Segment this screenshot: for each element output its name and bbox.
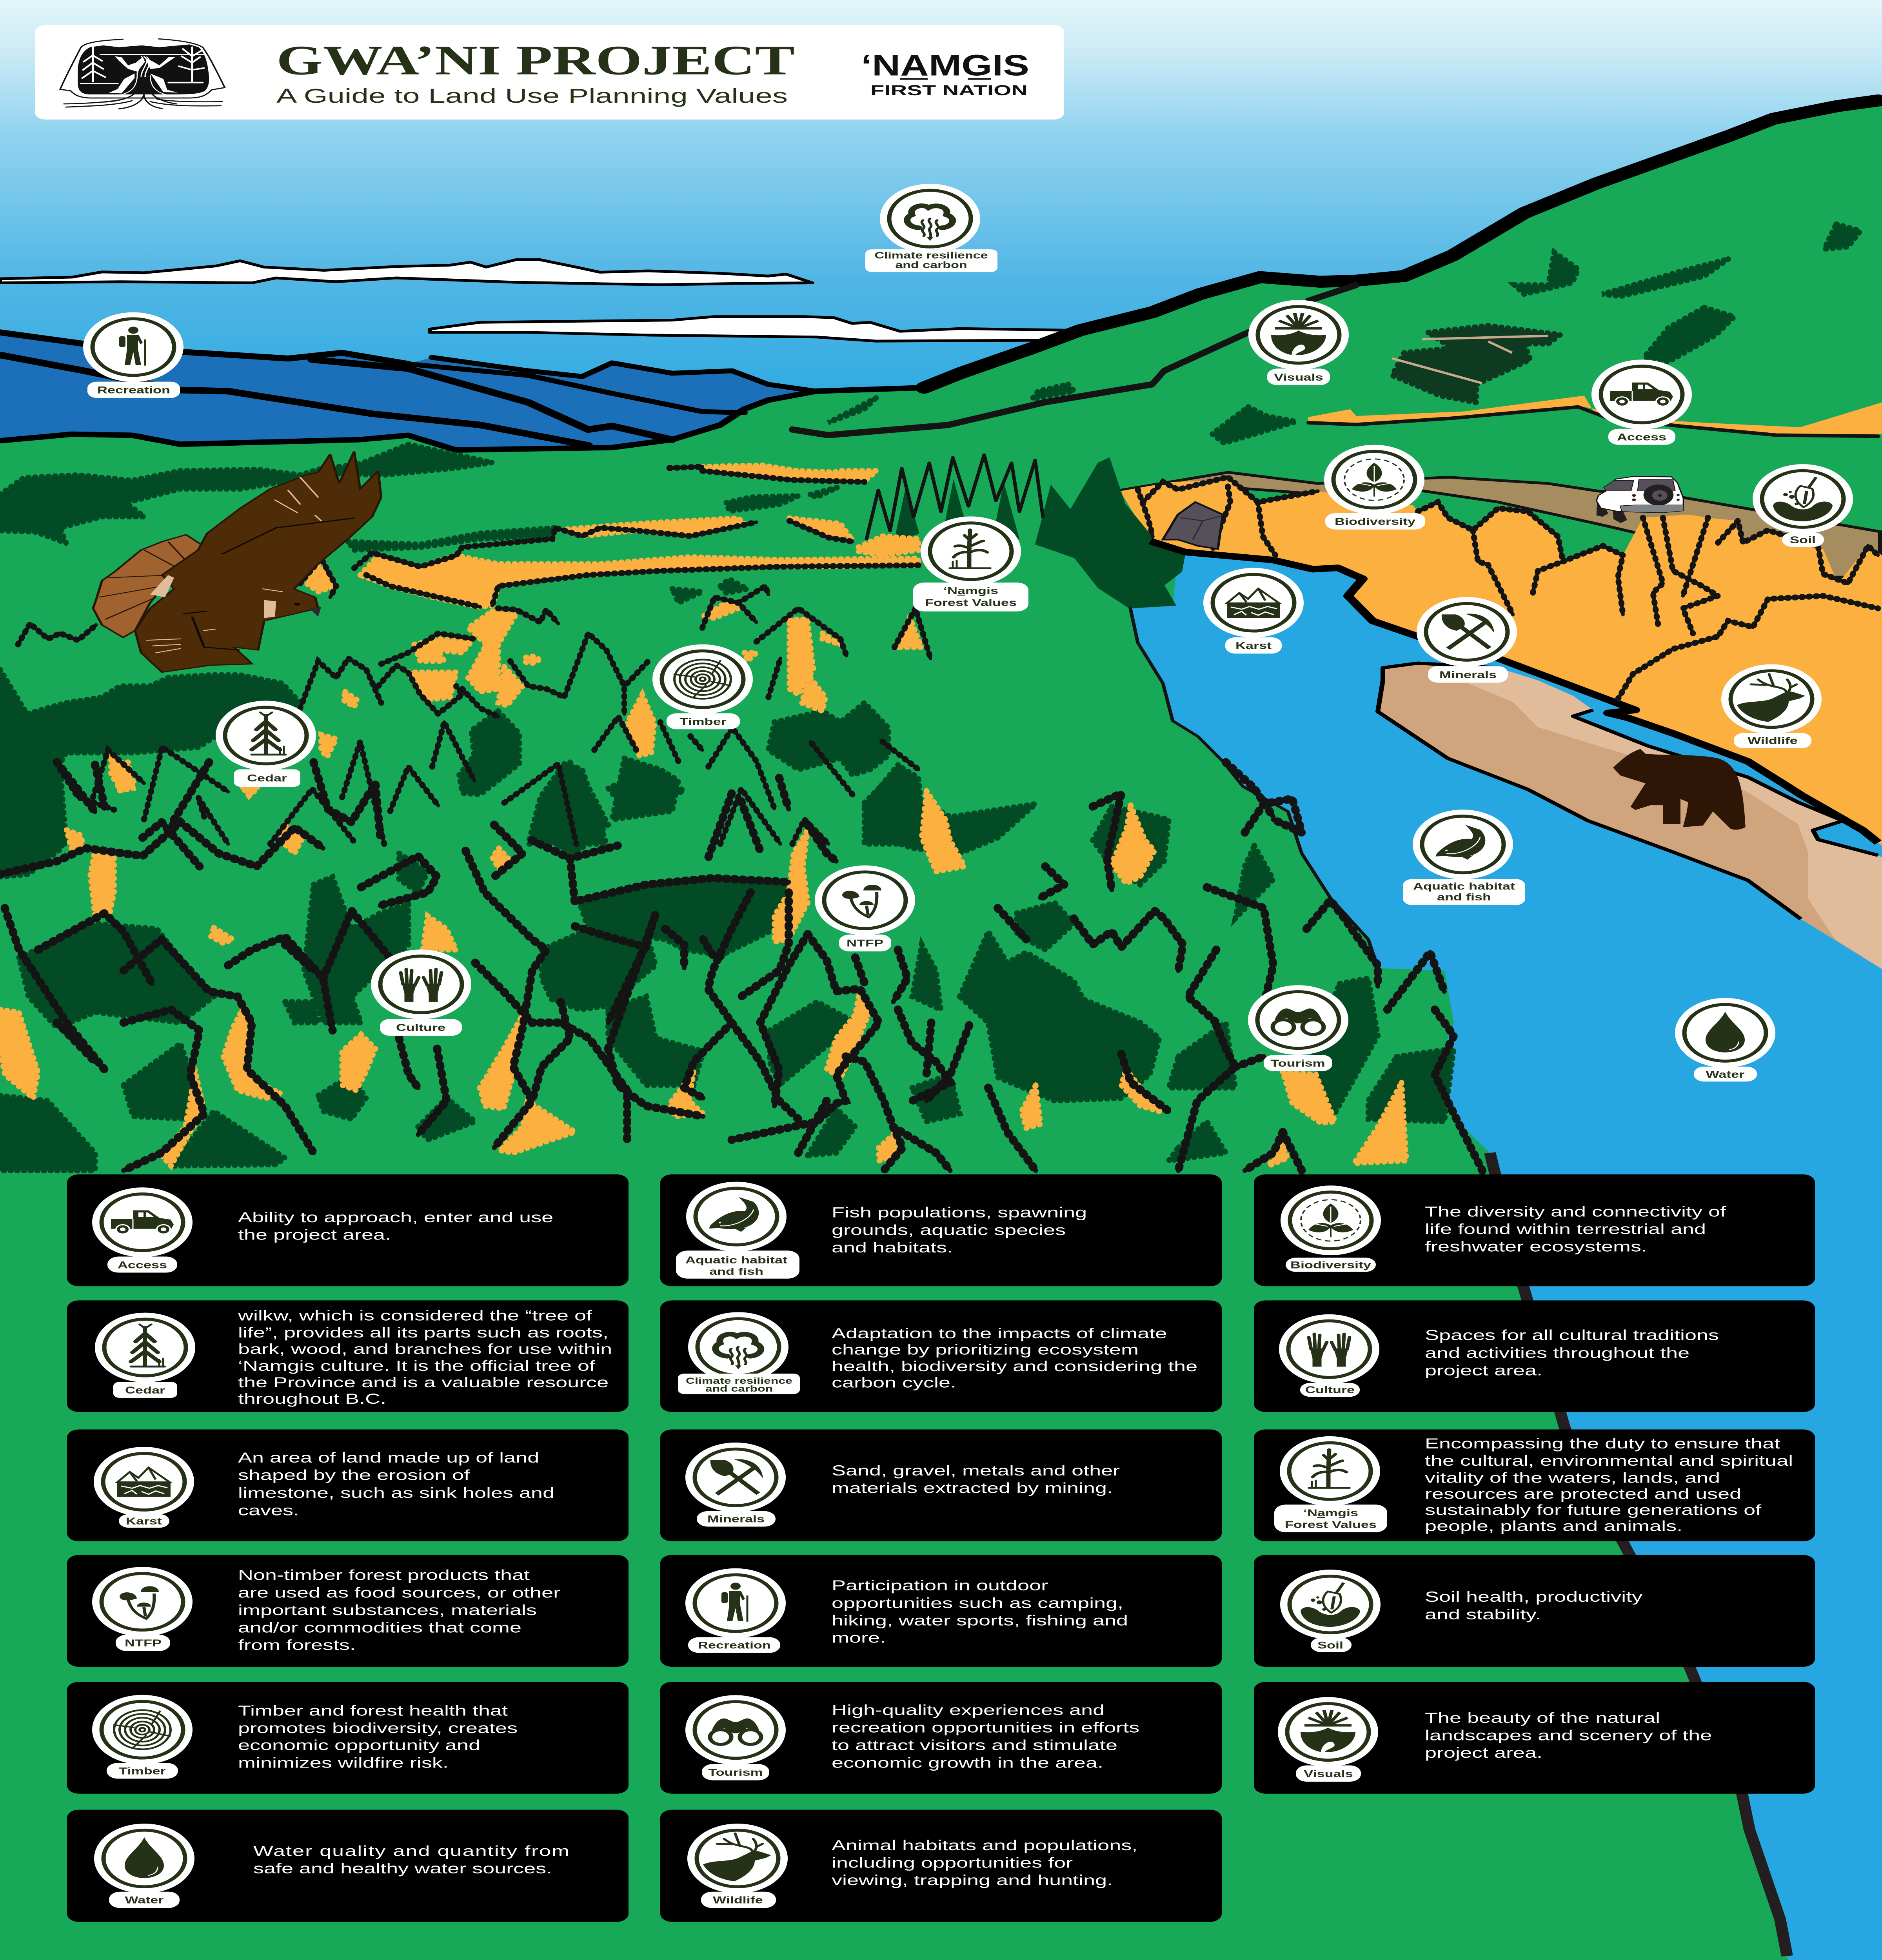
card: culture: and activities throughout the <box>1425 1345 1689 1361</box>
mountain ridges <box>0 100 1878 450</box>
value cards <box>67 1174 1815 1922</box>
upper forest orange patches <box>111 465 921 796</box>
white truck on the road <box>1597 476 1683 523</box>
hawk tail <box>93 535 201 637</box>
tree top cluster near the viewpoint <box>867 455 1043 539</box>
card: recreation: hiking, water sports, fishing and <box>832 1612 1128 1629</box>
marker: biodiversity <box>1324 445 1425 530</box>
card: water <box>67 1810 629 1922</box>
marker: cedar: Cedar <box>247 773 287 784</box>
marker: ntfp: NTFP <box>847 938 883 949</box>
orange land line work <box>1138 477 1878 699</box>
hawk in flight <box>93 452 381 672</box>
marker: wildlife <box>1721 664 1822 748</box>
card: karst <box>67 1430 629 1541</box>
card: recreation: more. <box>832 1629 886 1646</box>
marker: namgis forest values: ‘Namgis <box>943 585 998 596</box>
road <box>1120 472 1880 577</box>
marker: recreation <box>83 312 183 398</box>
hawk markings <box>147 477 321 653</box>
card: climate resilience and carbon: Climate resilience <box>686 1376 792 1386</box>
card: namgis forest values: Forest Values <box>1285 1519 1377 1530</box>
card: ntfp: Non-timber forest products that <box>238 1567 530 1583</box>
map markers <box>83 184 1853 1082</box>
card: cedar: life”, provides all its parts such as roots, <box>238 1324 609 1341</box>
marker: water <box>1675 998 1775 1082</box>
marker: recreation: Recreation <box>97 385 170 396</box>
sand spit highlight <box>1468 668 1882 969</box>
card: visuals: project area. <box>1425 1744 1542 1761</box>
card: aquatic habitat and fish: grounds, aquatic species <box>832 1222 1066 1238</box>
orange land <box>1120 480 1882 846</box>
card: namgis forest values: people, plants and animals. <box>1425 1518 1682 1534</box>
marker: culture <box>371 949 471 1036</box>
upper forest line work <box>18 466 930 844</box>
card: namgis forest values: Encompassing the duty to ensure that <box>1425 1435 1780 1452</box>
card: culture <box>1254 1300 1815 1412</box>
marker: access <box>1591 359 1692 445</box>
card: climate resilience and carbon: and carbon <box>705 1384 773 1394</box>
card: timber: Timber <box>119 1766 166 1777</box>
coastline below forest <box>1490 1153 1787 1956</box>
card: biodiversity: The diversity and connectivity of <box>1425 1203 1726 1220</box>
card: karst: caves. <box>238 1502 299 1518</box>
header panel <box>35 25 1064 120</box>
subtitle: A Guide to Land Use Planning Values <box>276 85 788 107</box>
hawk tail feathers <box>99 542 189 619</box>
card: aquatic habitat and fish: and habitats. <box>832 1239 953 1256</box>
sand spit outline <box>1378 663 1878 919</box>
card: karst: shaped by the erosion of <box>238 1467 470 1483</box>
card: minerals: Sand, gravel, metals and other <box>832 1462 1120 1479</box>
card: namgis forest values: the cultural, environmental and spiritual <box>1425 1452 1793 1469</box>
marker: climate resilience and carbon: and carbon <box>895 260 967 270</box>
marker: minerals <box>1417 597 1517 683</box>
marker: water: Water <box>1706 1069 1744 1080</box>
card: timber: promotes biodiversity, creates <box>238 1720 518 1736</box>
card: recreation <box>660 1555 1222 1667</box>
card: minerals: materials extracted by mining. <box>832 1479 1113 1496</box>
sky background <box>0 0 1882 544</box>
card: recreation: opportunities such as camping, <box>832 1595 1123 1611</box>
marker: climate resilience and carbon <box>865 184 997 272</box>
title: GWA’NI PROJECT <box>276 37 795 83</box>
river left bank jagged line <box>1130 608 1378 968</box>
marker: soil: Soil <box>1790 535 1816 546</box>
card: aquatic habitat and fish: and fish <box>709 1266 763 1277</box>
card: visuals: landscapes and scenery of the <box>1425 1727 1712 1744</box>
landscape line work and forest <box>0 100 1882 1171</box>
marker: visuals: Visuals <box>1274 372 1323 383</box>
nation wordmark: ‘NAMGIS <box>861 49 1029 82</box>
hawk body and wings <box>135 452 381 672</box>
card: timber: economic opportunity and <box>238 1737 480 1753</box>
card: tourism: to attract visitors and stimulate <box>832 1737 1117 1753</box>
dark conifers behind the tree top cluster <box>894 479 1019 542</box>
card: cedar: ‘Namgis culture. It is the official tree of <box>238 1357 595 1374</box>
card: biodiversity: freshwater ecosystems. <box>1425 1238 1647 1254</box>
card: karst: An area of land made up of land <box>238 1449 539 1466</box>
card: cedar: bark, wood, and branches for use within <box>238 1341 612 1357</box>
orange land line texture <box>1138 477 1878 699</box>
card: visuals <box>1254 1682 1815 1794</box>
card: wildlife: viewing, trapping and hunting. <box>832 1872 1113 1888</box>
card: tourism <box>660 1682 1222 1794</box>
card: climate resilience and carbon: health, biodiversity and considering the <box>832 1358 1197 1374</box>
marker: wildlife: Wildlife <box>1748 735 1798 746</box>
card: minerals: Minerals <box>707 1514 765 1524</box>
card: culture: project area. <box>1425 1362 1542 1378</box>
card: cedar <box>67 1300 629 1412</box>
card: namgis forest values: ‘Namgis <box>1303 1507 1358 1519</box>
marker: karst <box>1203 568 1304 653</box>
hillside details <box>792 224 1882 443</box>
card: wildlife: Wildlife <box>713 1895 763 1906</box>
card: aquatic habitat and fish <box>660 1174 1222 1286</box>
card: biodiversity: Biodiversity <box>1290 1259 1372 1270</box>
lower forest line work <box>0 762 1482 1171</box>
card: biodiversity <box>1254 1174 1815 1286</box>
card: culture: Culture <box>1305 1385 1355 1396</box>
marker: ntfp <box>815 866 915 951</box>
card: climate resilience and carbon: carbon cycle. <box>832 1374 956 1391</box>
card: water: safe and healthy water sources. <box>253 1860 552 1877</box>
lower forest dark green <box>0 762 1454 1171</box>
card: soil <box>1254 1555 1815 1667</box>
card: access: Ability to approach, enter and use <box>238 1209 553 1225</box>
marker: namgis forest values: Forest Values <box>925 597 1017 608</box>
marker: aquatic habitat and fish: and fish <box>1437 892 1491 903</box>
card: ntfp: from forests. <box>238 1637 356 1653</box>
card: climate resilience and carbon <box>660 1300 1222 1412</box>
card: timber: minimizes wildfire risk. <box>238 1755 449 1771</box>
card: access: Access <box>118 1259 167 1270</box>
card: aquatic habitat and fish: Fish populations, spawning <box>832 1204 1087 1221</box>
card: tourism: High-quality experiences and <box>832 1702 1104 1718</box>
card: biodiversity: life found within terrestrial and <box>1425 1221 1706 1237</box>
marker: biodiversity: Biodiversity <box>1335 516 1416 527</box>
card: cedar: the Province and is a valuable resource <box>238 1374 609 1390</box>
marker: aquatic habitat and fish <box>1403 809 1525 905</box>
card: climate resilience and carbon: Adaptation to the impacts of climate <box>832 1325 1167 1341</box>
marker: soil <box>1753 464 1853 547</box>
sand spit <box>1378 663 1882 969</box>
card: cedar: wilkw, which is considered the “tree of <box>238 1307 592 1324</box>
lower forest orange patches <box>0 762 1406 1166</box>
marker: namgis forest values <box>913 516 1028 612</box>
card: recreation: Recreation <box>698 1640 771 1651</box>
river right bank heavy line <box>1150 541 1878 842</box>
marker: timber <box>652 644 753 729</box>
bear <box>1613 749 1746 830</box>
upper forest dark green <box>0 445 925 844</box>
icon: project logo <box>60 39 225 109</box>
card: tourism: economic growth in the area. <box>832 1755 1103 1771</box>
card: visuals: Visuals <box>1304 1768 1353 1779</box>
card: water: Water <box>125 1895 163 1906</box>
card: namgis forest values: resources are protected and used <box>1425 1486 1741 1502</box>
card: karst: Karst <box>126 1515 162 1527</box>
card: access: the project area. <box>238 1227 391 1243</box>
card: recreation: Participation in outdoor <box>832 1577 1048 1593</box>
tall dark conifer by the river <box>1035 457 1186 608</box>
marker: karst: Karst <box>1235 640 1272 651</box>
marker: aquatic habitat and fish: Aquatic habitat <box>1413 881 1515 892</box>
card: timber <box>67 1682 629 1794</box>
card: water: Water quality and quantity from <box>253 1843 569 1859</box>
distant blue mountains <box>0 332 816 463</box>
card: karst: limestone, such as sink holes and <box>238 1485 554 1501</box>
nation wordmark: FIRST NATION <box>870 82 1028 98</box>
card: tourism: Tourism <box>708 1767 763 1778</box>
card: culture: Spaces for all cultural traditions <box>1425 1327 1719 1343</box>
card: soil: Soil <box>1317 1640 1343 1651</box>
card: soil: and stability. <box>1425 1606 1541 1622</box>
card: ntfp: NTFP <box>125 1637 162 1649</box>
card: wildlife: Animal habitats and populations, <box>832 1837 1137 1853</box>
card: namgis forest values: sustainably for future generations of <box>1425 1502 1761 1518</box>
card: tourism: recreation opportunities in efforts <box>832 1719 1139 1736</box>
marker: timber: Timber <box>679 716 727 727</box>
card: ntfp: important substances, materials <box>238 1602 537 1618</box>
marker: tourism <box>1248 985 1348 1071</box>
card: visuals: The beauty of the natural <box>1425 1710 1660 1726</box>
nation wordmark <box>861 49 1029 98</box>
marker: cedar <box>216 701 316 787</box>
card: namgis forest values: vitality of the waters, lands, and <box>1425 1470 1720 1486</box>
card: cedar: throughout B.C. <box>238 1390 386 1407</box>
upper forest line texture <box>18 466 930 844</box>
card: cedar: Cedar <box>125 1385 165 1396</box>
river and sea <box>1130 541 1882 1960</box>
card: soil: Soil health, productivity <box>1425 1588 1643 1605</box>
marker: tourism: Tourism <box>1270 1058 1325 1069</box>
marker: access: Access <box>1617 432 1666 443</box>
marker: culture: Culture <box>396 1022 445 1033</box>
card: ntfp: are used as food sources, or other <box>238 1584 560 1601</box>
marker: climate resilience and carbon: Climate resilience <box>874 251 988 261</box>
card: ntfp: and/or commodities that come <box>238 1619 521 1636</box>
card: minerals <box>660 1430 1222 1541</box>
clouds <box>0 260 1068 341</box>
card: access <box>67 1174 629 1286</box>
card: wildlife <box>660 1810 1222 1922</box>
cave <box>1163 502 1223 549</box>
card: namgis forest values <box>1254 1430 1815 1541</box>
card: wildlife: including opportunities for <box>832 1855 1073 1871</box>
card: ntfp <box>67 1555 629 1667</box>
card: aquatic habitat and fish: Aquatic habitat <box>685 1254 787 1266</box>
marker: visuals <box>1248 300 1349 385</box>
card: climate resilience and carbon: change by prioritizing ecosystem <box>832 1341 1139 1358</box>
card: timber: Timber and forest health that <box>238 1702 508 1719</box>
marker: minerals: Minerals <box>1439 669 1497 681</box>
lower forest line texture <box>0 762 1482 1171</box>
